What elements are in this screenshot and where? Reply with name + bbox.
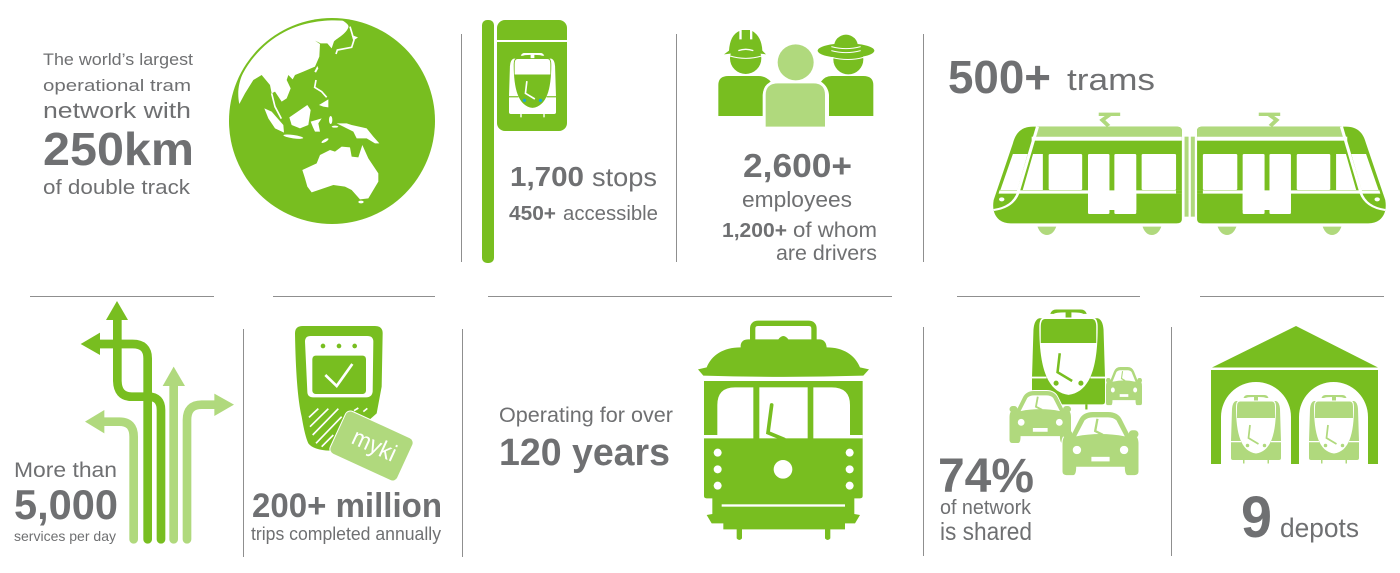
text: years operating: 120 years bbox=[499, 432, 670, 474]
text: network length: of double track bbox=[43, 177, 191, 199]
text: employees: 2,600+ bbox=[743, 147, 852, 184]
icon: tram stop sign bbox=[482, 20, 567, 263]
text: trams bbox=[948, 51, 1155, 103]
text: network length: network with bbox=[43, 98, 191, 123]
text: trips bbox=[251, 487, 442, 544]
text: depots: depots bbox=[1280, 513, 1359, 543]
text: employees: 1,200+ bbox=[722, 220, 787, 242]
text: employees: of whom bbox=[793, 219, 877, 242]
text: years operating: Operating for over bbox=[499, 404, 673, 427]
text: services: More than bbox=[14, 459, 117, 482]
text: services: 5,000 bbox=[14, 481, 118, 528]
icon: heritage W-class tram bbox=[698, 323, 869, 540]
text: depots bbox=[1241, 485, 1359, 550]
text: depots: 9 bbox=[1241, 485, 1272, 550]
text: shared network: is shared bbox=[940, 518, 1032, 546]
icon: tram and cars sharing road bbox=[1010, 309, 1142, 475]
icon: articulated tram bbox=[993, 114, 1386, 235]
text: stops: accessible bbox=[563, 203, 658, 225]
text: stops: stops bbox=[592, 162, 657, 192]
text: trips: trips completed annually bbox=[251, 524, 441, 544]
text: network length: operational tram bbox=[43, 76, 191, 95]
text: employees bbox=[722, 147, 877, 265]
icon: myki reader and card bbox=[295, 326, 414, 482]
text: employees: are drivers bbox=[776, 242, 877, 265]
text: years operating bbox=[499, 404, 673, 474]
text: shared network bbox=[938, 450, 1034, 546]
text: stops: 1,700 bbox=[510, 161, 584, 192]
text: stops: 450+ bbox=[509, 203, 556, 225]
icon: three staff figures bbox=[718, 30, 874, 127]
text: services: services per day bbox=[14, 528, 116, 544]
text: network length: 250km bbox=[43, 123, 194, 175]
text: stops bbox=[509, 161, 658, 225]
text: services bbox=[14, 459, 118, 544]
text: trips: 200+ million bbox=[252, 487, 442, 525]
text: trams: 500+ bbox=[948, 51, 1051, 103]
text: network length: The world’s largest bbox=[43, 50, 193, 69]
text: network length bbox=[43, 50, 194, 199]
text: employees: employees bbox=[742, 187, 852, 212]
text: shared network: of network bbox=[940, 497, 1032, 519]
text: trams: trams bbox=[1067, 62, 1155, 97]
icon: route arrows bbox=[81, 301, 234, 539]
text: shared network: 74% bbox=[938, 450, 1034, 503]
icon: depot shed bbox=[1211, 326, 1378, 464]
icon: myki reader and card: myki bbox=[348, 424, 401, 467]
icon: globe bbox=[229, 18, 435, 224]
